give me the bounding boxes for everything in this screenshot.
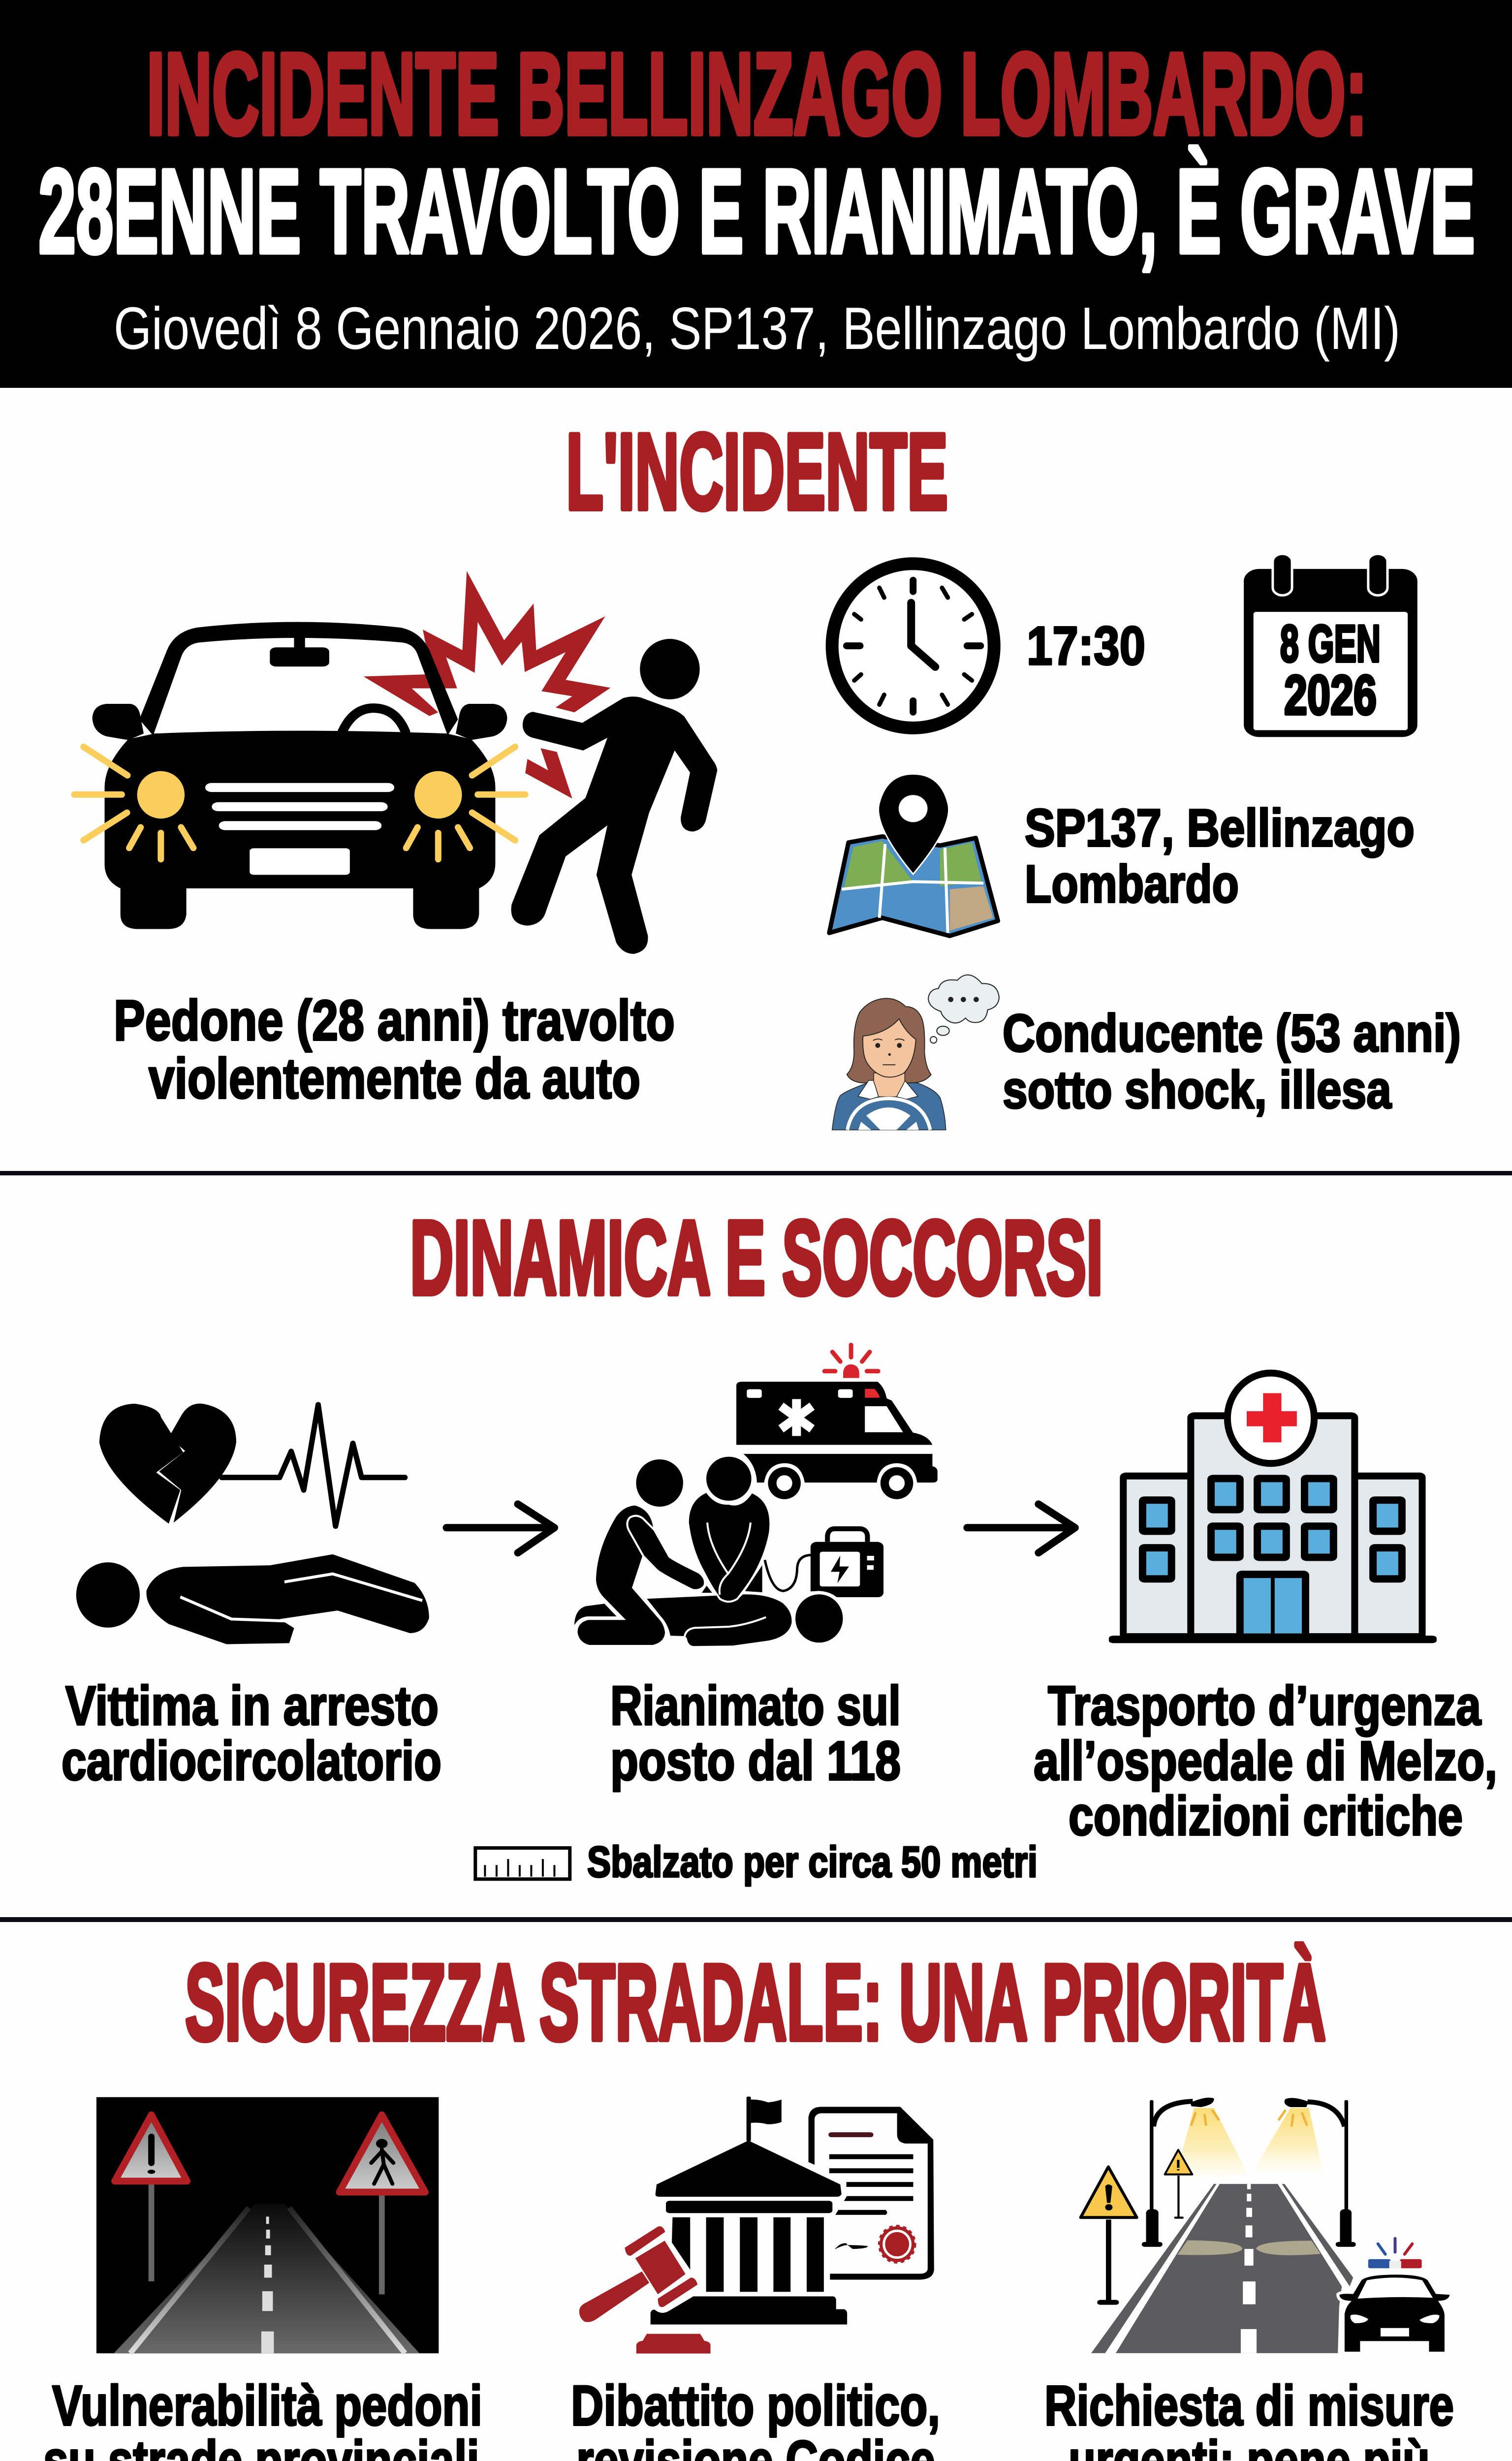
heading: l'incidente: L'INCIDENTE	[566, 411, 948, 532]
location text: Lombardo	[1025, 854, 1239, 914]
icon: dark road with signs	[96, 2097, 439, 2353]
time text: 17:30	[1027, 616, 1145, 676]
note: 50 metri: Sbalzato per circa 50 metri	[587, 1837, 1038, 1886]
caption: pedone: Pedone (28 anni) travolto	[114, 988, 675, 1052]
arrow: to resuscitation	[446, 1504, 554, 1553]
panel: sicurezza stradale	[43, 1942, 1454, 2461]
icon: clock	[832, 564, 994, 728]
caption: vittima	[62, 1675, 441, 1792]
icon: street with lamps and police	[1081, 2098, 1451, 2353]
driver text	[1003, 1003, 1461, 1119]
caption: pedone	[114, 988, 675, 1110]
caption: vulnerabilità	[43, 2374, 492, 2461]
icon: car hitting pedestrian	[74, 571, 717, 954]
icon: hospital	[1109, 1373, 1437, 1643]
icon: calendar: 2026	[1284, 664, 1377, 726]
location text: SP137, Bellinzago	[1025, 798, 1415, 857]
caption: richiesta	[1044, 2374, 1454, 2461]
icon: ambulance	[736, 1345, 938, 1499]
icon: calendar: 8 GEN	[1280, 615, 1381, 673]
caption: vittima: cardiocircolatorio	[62, 1730, 441, 1792]
caption: vulnerabilità: Vulnerabilità pedoni	[52, 2374, 482, 2437]
caption: trasporto	[1034, 1675, 1497, 1847]
panel: dinamica e soccorsi	[62, 1199, 1497, 1886]
caption: dibattito: Dibattito politico,	[571, 2374, 940, 2437]
arrow: to hospital	[967, 1504, 1075, 1553]
panel: l'incidente	[74, 411, 1461, 1130]
icon: calendar	[1244, 554, 1418, 737]
caption: pedone: violentemente da auto	[149, 1046, 640, 1110]
icon: CPR and defibrillator	[574, 1456, 883, 1646]
caption: vittima: Vittima in arresto	[65, 1675, 439, 1736]
panel: header	[0, 0, 1512, 388]
icon: ruler	[475, 1848, 570, 1879]
icon: broken heart with victim	[76, 1404, 429, 1644]
icon: parliament, document, gavel	[579, 2097, 934, 2354]
location text	[1025, 798, 1415, 914]
caption: rianimato: posto dal 118	[610, 1730, 901, 1792]
icon: map pin	[829, 774, 998, 936]
caption: rianimato	[610, 1675, 901, 1792]
driver text: sotto shock, illesa	[1003, 1060, 1392, 1119]
icon: shocked driver	[832, 975, 999, 1130]
caption: rianimato: Rianimato sul	[610, 1675, 901, 1736]
caption: dibattito	[571, 2374, 940, 2461]
